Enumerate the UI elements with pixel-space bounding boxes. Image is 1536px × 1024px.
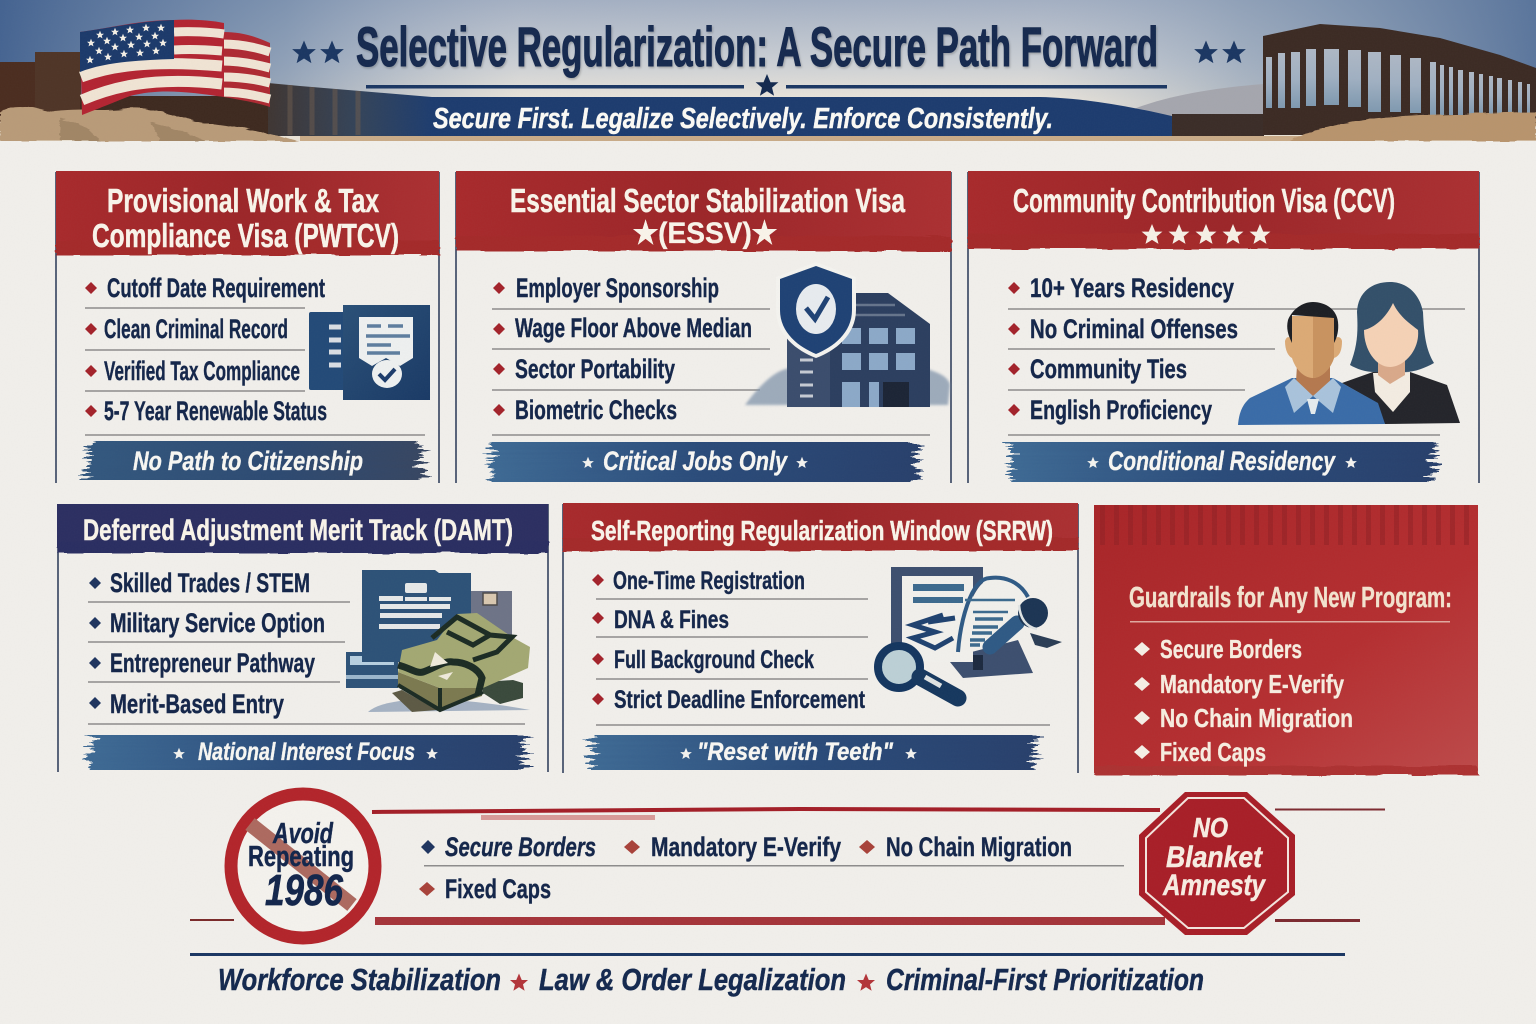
left desert scrub — [0, 107, 300, 141]
footer ribbon: Conditional Residency — [1108, 446, 1337, 476]
list — [85, 273, 425, 435]
list — [1134, 634, 1353, 767]
low fence segment right — [1172, 114, 1264, 136]
list: Secure Borders — [1160, 634, 1302, 664]
heading — [510, 182, 905, 250]
navy rule — [190, 953, 1345, 956]
requirements list: Mandatory E-Verify — [651, 832, 841, 862]
footer ribbon: Critical Jobs Only — [603, 446, 789, 476]
panel header — [56, 171, 439, 255]
title stars right — [1194, 40, 1246, 63]
heading: ★(ESSV)★ — [633, 217, 777, 250]
list: Cutoff Date Requirement — [107, 273, 325, 303]
footer ribbon — [491, 442, 917, 482]
footer ribbon: No Path to Citizenship — [133, 446, 363, 476]
stop sign: no blanket amnesty: NO — [1193, 812, 1228, 843]
American flag — [80, 20, 270, 115]
footer ribbon — [591, 735, 1035, 770]
panel: SRRW — [563, 503, 1078, 773]
list: Mandatory E-Verify — [1160, 669, 1344, 699]
top red brush rule — [372, 808, 1385, 820]
bottom tagline: Criminal-First Prioritization — [886, 962, 1204, 997]
icon: avoid repeating 1986 prohibition sign — [231, 794, 375, 938]
bottom tagline — [218, 962, 1204, 997]
icon: documents with check — [309, 305, 430, 400]
title rule with star — [366, 74, 1167, 96]
list: Fixed Caps — [1160, 737, 1266, 767]
stop sign: no blanket amnesty: Amnesty — [1162, 869, 1266, 902]
header banner scene — [0, 0, 1536, 141]
list — [88, 568, 525, 724]
panel header — [456, 171, 951, 251]
list: Sector Portability — [515, 354, 675, 384]
right border fence — [1263, 24, 1536, 135]
heading: Essential Sector Stabilization Visa — [510, 182, 905, 219]
requirements list — [419, 832, 1072, 904]
footer ribbon — [92, 735, 524, 770]
list — [592, 567, 1050, 725]
panel: ESSV — [456, 171, 951, 483]
icon: avoid repeating 1986 prohibition sign: Repeating — [248, 841, 354, 873]
panel: PWTCV — [56, 171, 439, 483]
heading: Provisional Work & Tax — [107, 182, 379, 219]
icon: document, stamp and magnifier — [878, 567, 1062, 698]
heading — [1013, 182, 1395, 244]
list: 10+ Years Residency — [1030, 273, 1234, 303]
woman — [1342, 282, 1460, 424]
list: English Proficiency — [1030, 395, 1212, 425]
bottom red brush rule — [190, 917, 1360, 925]
stop sign: no blanket amnesty: Blanket — [1166, 841, 1264, 874]
list: Full Background Check — [614, 646, 814, 674]
footer ribbon — [88, 441, 422, 480]
requirements list: Secure Borders — [445, 832, 596, 862]
bottom tagline: Law & Order Legalization — [539, 962, 846, 997]
list — [1008, 273, 1465, 435]
tan ground strip — [300, 136, 1300, 141]
list: Skilled Trades / STEM — [110, 568, 310, 598]
rule between lists — [424, 865, 1124, 866]
icon: shield and building — [745, 262, 950, 407]
list: No Chain Migration — [1160, 703, 1353, 733]
panel: CCV — [968, 171, 1479, 483]
list: No Criminal Offenses — [1030, 314, 1238, 344]
list: Merit-Based Entry — [110, 689, 284, 719]
heading: Self-Reporting Regularization Window (SRRW) — [591, 515, 1053, 546]
list: Community Ties — [1030, 354, 1187, 384]
list: DNA & Fines — [614, 606, 729, 634]
panel: DAMT — [57, 504, 548, 772]
man — [1238, 302, 1385, 425]
icon: avoid repeating 1986 prohibition sign: 1986 — [265, 866, 343, 915]
list: Entrepreneur Pathway — [110, 648, 315, 678]
list: One-Time Registration — [613, 567, 805, 595]
panel header — [57, 504, 548, 553]
list: Military Service Option — [110, 608, 325, 638]
panel header — [563, 503, 1078, 551]
icon: file folder and cash stack — [346, 570, 530, 712]
footer ribbon — [1010, 442, 1432, 482]
left border wall — [0, 52, 432, 136]
list: Clean Criminal Record — [104, 314, 288, 344]
list: Employer Sponsorship — [516, 273, 719, 303]
footer ribbon: "Reset with Teeth" — [697, 738, 894, 766]
list: 5-7 Year Renewable Status — [104, 396, 327, 426]
stop sign: no blanket amnesty — [1139, 792, 1295, 935]
distant mountains — [1115, 84, 1264, 120]
list: Biometric Checks — [515, 395, 677, 425]
heading: Deferred Adjustment Merit Track (DAMT) — [83, 514, 513, 547]
icon: two people — [1238, 282, 1460, 425]
list: Verified Tax Compliance — [104, 356, 300, 386]
subtitle: Secure First. Legalize Selectively. Enforce Consistently. — [433, 103, 1053, 135]
panel header — [968, 171, 1479, 249]
requirements list: No Chain Migration — [886, 832, 1072, 862]
list — [492, 273, 930, 435]
subtitle ribbon background — [430, 97, 1195, 137]
icon: avoid repeating 1986 prohibition sign: Avoid — [272, 818, 334, 850]
title stars left — [292, 40, 344, 63]
requirements list: Fixed Caps — [445, 874, 551, 904]
list: Strict Deadline Enforcement — [614, 686, 865, 714]
footer ribbon: National Interest Focus — [198, 738, 415, 766]
panel: guardrails — [1094, 505, 1478, 775]
heading — [92, 182, 399, 254]
bottom tagline: Workforce Stabilization — [218, 962, 501, 997]
right desert hill — [1290, 112, 1536, 141]
heading: Compliance Visa (PWTCV) — [92, 217, 399, 254]
list: Wage Floor Above Median — [515, 313, 752, 343]
